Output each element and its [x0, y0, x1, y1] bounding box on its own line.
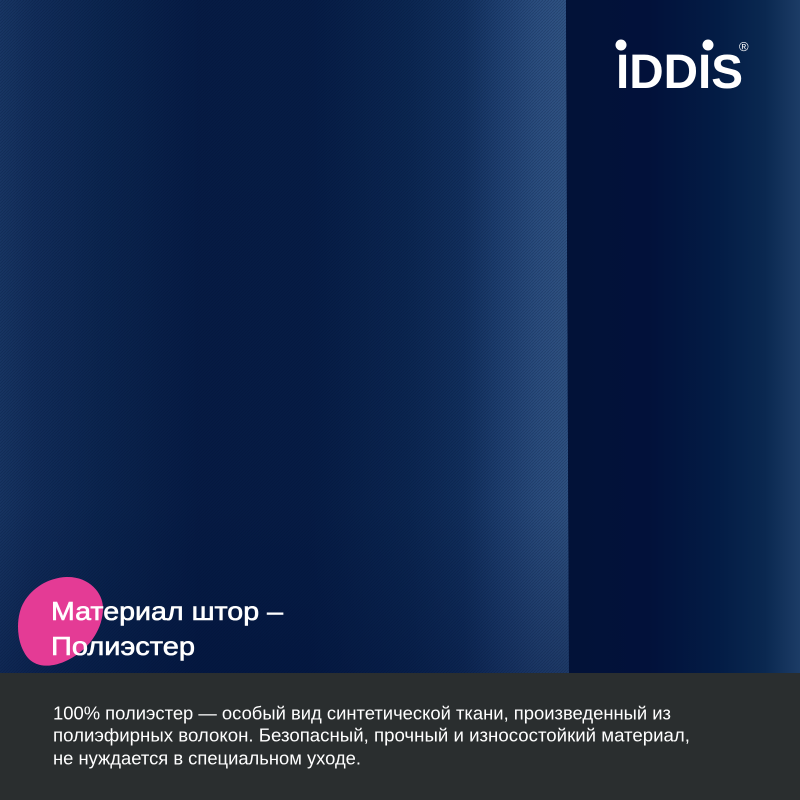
icon: pink blob behind heading — [18, 577, 103, 666]
logo: IDDIS: ® — [739, 39, 749, 54]
text block: description: полиэфирных волокон. Безопасный, прочный и износостойкий материал, — [53, 726, 690, 746]
logo: IDDIS: IDDIS — [616, 46, 743, 99]
text block: description — [53, 704, 690, 768]
heading — [51, 596, 284, 661]
text block: description: не нуждается в специальном уходе. — [53, 748, 361, 768]
heading: Полиэстер — [51, 631, 195, 661]
text block: description: 100% полиэстер — особый вид синтетической ткани, произведенный из — [53, 704, 671, 724]
panel: bottom description bar — [0, 673, 800, 800]
curtain left fold — [0, 0, 569, 673]
curtain right fold — [566, 0, 800, 673]
heading: Материал штор – — [51, 596, 284, 626]
